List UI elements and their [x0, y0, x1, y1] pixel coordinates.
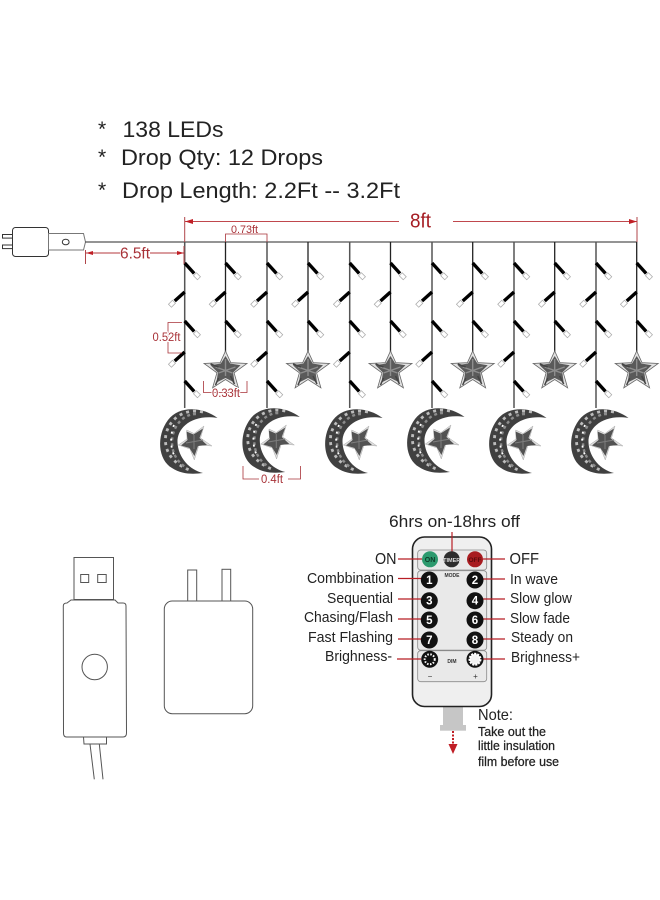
top buttons: on, timer, off: TIMER: [443, 558, 460, 564]
right labels: In wave: [510, 572, 558, 588]
right labels: OFF: [510, 551, 539, 568]
left labels: [304, 551, 396, 665]
dimension: spacing 0.73ft: [226, 224, 267, 242]
left labels: Brighness-: [325, 649, 392, 665]
numbered mode buttons: 6: [472, 615, 478, 627]
dimension: star width 0.33ft: 0.33ft: [212, 388, 241, 400]
mode and dim captions: −: [428, 672, 433, 681]
numbered mode buttons: 3: [426, 596, 433, 608]
numbered mode buttons: 5: [426, 615, 433, 627]
right labels: Slow glow: [510, 591, 572, 607]
numbered mode buttons: 4: [472, 596, 479, 608]
spec: drop length: Drop Length: 2.2Ft -- 3.2Ft: [122, 178, 400, 203]
dimension: star width 0.33ft: [204, 381, 247, 400]
icon: power adapter: [164, 569, 253, 714]
note: Take out the: [478, 724, 546, 739]
spec: LED count: 138 LEDs: [122, 117, 224, 142]
dimension: moon width 0.4ft: [243, 466, 300, 486]
left labels: Fast Flashing: [308, 630, 393, 646]
spec: drop length: *: [98, 179, 106, 202]
curtain light diagram: [2, 228, 658, 474]
spec: drop quantity: Drop Qty: 12 Drops: [121, 145, 323, 170]
main horizontal wire: [85, 241, 637, 243]
red leader lines: [397, 532, 505, 659]
remote control: [397, 532, 505, 754]
right labels: Steady on: [511, 630, 573, 646]
pull direction arrow: [448, 731, 458, 754]
timer label: 6hrs on-18hrs off: [389, 512, 520, 531]
brightness buttons: [421, 651, 484, 668]
mode and dim captions: DIM: [447, 659, 457, 665]
dimension: spacing 0.73ft: 0.73ft: [231, 224, 258, 236]
note: little insulation: [478, 738, 555, 753]
top buttons: on, timer, off: OFF: [468, 557, 482, 564]
numbered mode buttons: 2: [472, 575, 478, 587]
dimension: moon width 0.4ft: 0.4ft: [261, 474, 284, 486]
left labels: Sequential: [327, 591, 393, 607]
numbered mode buttons: 1: [426, 575, 433, 587]
numbered mode buttons: 8: [472, 635, 479, 647]
left labels: Combbination: [307, 571, 394, 587]
right labels: Slow fade: [510, 611, 570, 627]
remote body: [412, 537, 492, 706]
button panels: [418, 550, 487, 682]
note: [478, 707, 559, 769]
dimension: total width 8ft: [185, 210, 637, 242]
dimension: LED gap 0.52ft: [152, 322, 182, 353]
icon: wall plug with cable: [2, 228, 86, 256]
dimension: lead 6.5ft: [86, 246, 184, 264]
top buttons: on, timer, off: [422, 551, 483, 567]
moon and star ornaments: [160, 408, 628, 474]
dimension: total width 8ft: 8ft: [410, 210, 431, 232]
hanging drops with LEDs: [170, 242, 658, 408]
right labels: Brighness+: [511, 650, 580, 666]
numbered mode buttons: 7: [426, 635, 433, 647]
icon: USB plug with switch: [63, 558, 126, 779]
remote function labels: [304, 512, 580, 769]
dimension: LED gap 0.52ft: 0.52ft: [152, 332, 181, 344]
note: film before use: [478, 754, 559, 769]
numbered mode buttons: [421, 572, 484, 648]
dimension: lead 6.5ft: 6.5ft: [120, 246, 151, 262]
spec: LED count: *: [98, 118, 106, 141]
left labels: Chasing/Flash: [304, 610, 393, 626]
specification list: [98, 117, 400, 203]
mode and dim captions: +: [473, 672, 478, 681]
mode and dim captions: [428, 573, 478, 681]
top buttons: on, timer, off: ON: [425, 557, 435, 564]
mode and dim captions: MODE: [444, 573, 460, 579]
right labels: [510, 551, 580, 666]
left labels: ON: [375, 551, 396, 568]
spec: drop quantity: *: [98, 146, 106, 169]
note: Note:: [478, 707, 513, 724]
insulation film tab: [440, 706, 466, 731]
